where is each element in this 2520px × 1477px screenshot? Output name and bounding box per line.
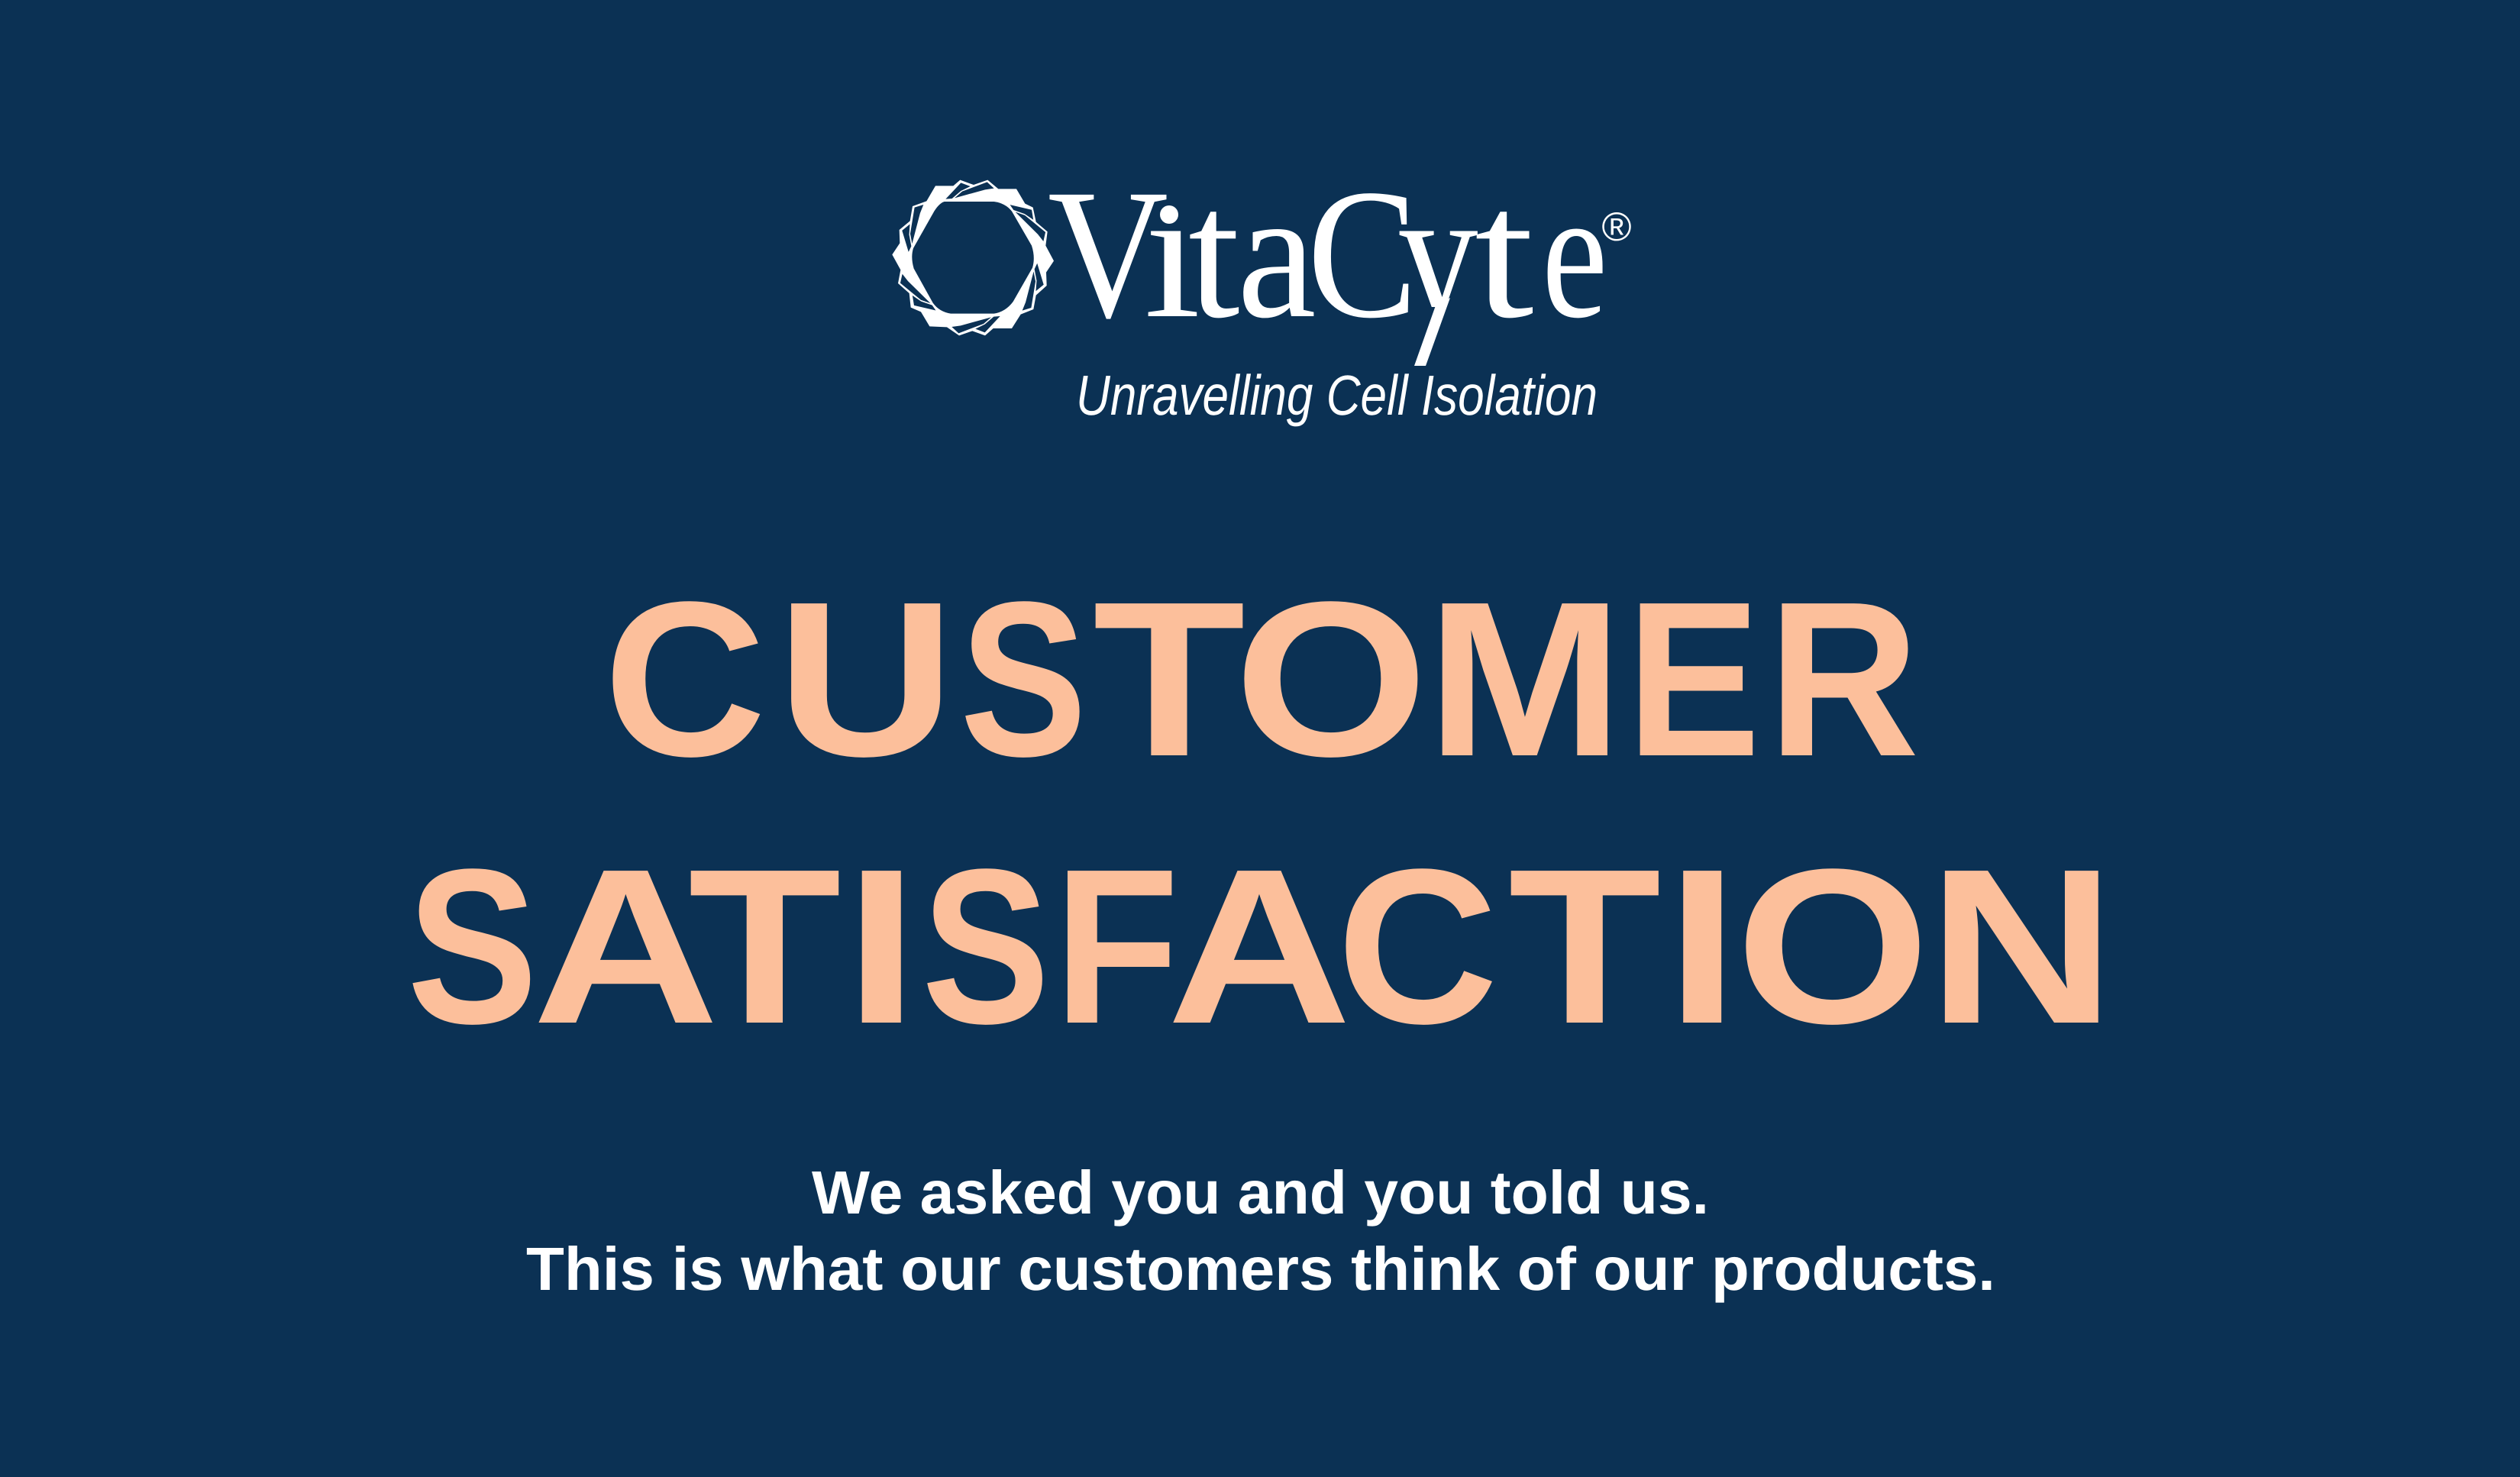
tagline: Unravelling Cell Isolation xyxy=(1076,364,1598,427)
registered mark: ® xyxy=(1601,205,1632,250)
title: customer satisfaction xyxy=(407,556,2116,1070)
title line 1 xyxy=(603,556,1919,803)
title line 1: T xyxy=(1093,556,1245,803)
title line 2: S xyxy=(407,823,538,1070)
wordmark: y xyxy=(1397,150,1478,357)
title line 2: N xyxy=(1927,823,2116,1070)
logo: VitaCyte xyxy=(892,180,1631,426)
title line 1: R xyxy=(1768,556,1919,803)
subtitle text xyxy=(526,1159,1995,1303)
title line 2: F xyxy=(1054,823,1179,1070)
wordmark: V xyxy=(1048,150,1168,357)
title line 2 xyxy=(407,823,2116,1070)
title line 1: E xyxy=(1627,556,1760,803)
wordmark: t xyxy=(1475,150,1534,357)
wordmark xyxy=(1049,193,1603,366)
title line 2: A xyxy=(1167,823,1352,1070)
wordmark: e xyxy=(1542,150,1607,357)
subtitle line 1: We asked you and you told us. xyxy=(812,1159,1709,1227)
icon: hexagonal cell ring xyxy=(892,180,1054,335)
title line 1: O xyxy=(1234,556,1428,803)
wordmark: t xyxy=(1188,150,1240,357)
title line 1: U xyxy=(777,556,955,803)
title line 2: T xyxy=(1508,823,1661,1070)
subtitle line 2: This is what our customers think of our products. xyxy=(526,1235,1995,1303)
wordmark: a xyxy=(1237,150,1317,357)
title line 2: A xyxy=(532,823,719,1070)
title line 1: M xyxy=(1426,556,1623,803)
title line 2: I xyxy=(844,823,919,1070)
title line 1: C xyxy=(603,556,766,803)
title line 2: C xyxy=(1336,823,1498,1070)
wordmark: i xyxy=(1144,150,1200,357)
wordmark: C xyxy=(1307,150,1417,357)
title line 2: T xyxy=(688,823,842,1070)
title line 2: S xyxy=(922,823,1050,1070)
title line 2: O xyxy=(1736,823,1930,1070)
title line 2: I xyxy=(1665,823,1739,1070)
title line 1: S xyxy=(960,556,1087,803)
